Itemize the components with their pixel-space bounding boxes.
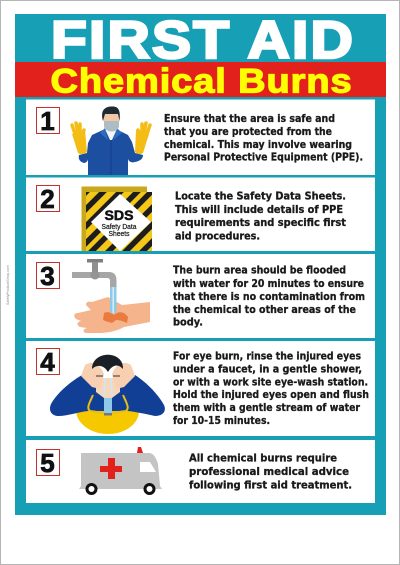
- number badge 2: [36, 184, 60, 214]
- step 3 text: that there is no contamination from: [173, 292, 365, 303]
- number badge 3: 3: [40, 261, 55, 291]
- step 5 text: following first aid treatment.: [189, 480, 352, 491]
- step 4 text: [173, 352, 369, 427]
- step 4 text: or with a work site eye-wash station.: [173, 378, 368, 388]
- icon: ambulance: [79, 447, 162, 494]
- step 1 text: that you are protected from the: [164, 127, 332, 138]
- step 2 text: aid procedures.: [175, 231, 260, 242]
- step 1 text: [164, 114, 363, 164]
- step 4 text: Hold the injured eyes open and flush: [173, 390, 369, 401]
- panel: step 4: [26, 341, 375, 436]
- number badge 2: 2: [40, 184, 55, 214]
- icon: worker in protective equipment: [72, 106, 150, 175]
- step 4 text: them with a gentle stream of water: [173, 403, 360, 414]
- step 2 text: Locate the Safety Data Sheets.: [175, 192, 346, 202]
- step 4 text: for 10-15 minutes.: [173, 416, 270, 427]
- icon: hand under running faucet: [72, 259, 150, 333]
- icon: man rinsing eyes at eye-wash station: [50, 355, 165, 434]
- step 1 text: Personal Protective Equipment (PPE).: [164, 152, 363, 164]
- number badge 4: 4: [40, 347, 55, 377]
- red subtitle band: [15, 62, 386, 97]
- step 2 text: This will include details of PPE: [175, 205, 343, 216]
- number badge 5: [36, 448, 60, 478]
- step 5 text: [189, 454, 352, 491]
- step 3 text: with water for 20 minutes to ensure: [173, 279, 364, 290]
- step 1 text: chemical. This may involve wearing: [164, 140, 352, 151]
- step 4 text: For eye burn, rinse the injured eyes: [173, 352, 361, 362]
- title: FIRST AID: [51, 11, 355, 70]
- icon: safety data sheets binder: Sheets: [108, 229, 130, 238]
- number badge 5: 5: [40, 448, 55, 478]
- label: SDS: SDS: [104, 208, 134, 223]
- number badge 1: 1: [40, 106, 55, 136]
- step 2 text: requirements and specific first: [175, 218, 346, 229]
- step 3 text: body.: [173, 318, 203, 328]
- number badge 3: [36, 261, 60, 291]
- panel: step 3: [26, 254, 375, 338]
- panel: step 2: [26, 178, 375, 259]
- number badge 4: [36, 347, 60, 377]
- step 2 text: [175, 192, 346, 242]
- number badge 1: [36, 106, 60, 136]
- step 3 text: the chemical to other areas of the: [173, 305, 356, 316]
- step 3 text: [173, 266, 365, 328]
- icon: safety data sheets binder: [82, 186, 152, 251]
- panel: step 5: [26, 440, 375, 503]
- step 3 text: The burn area should be flooded: [173, 266, 346, 276]
- icon: safety data sheets binder: Safety Data: [102, 222, 137, 231]
- side credit text: SafetyProductShop.com: [6, 265, 10, 305]
- step 4 text: under a faucet, in a gentle shower,: [173, 364, 362, 376]
- panel: step 1: [26, 100, 375, 175]
- step 5 text: All chemical burns require: [189, 454, 337, 464]
- subtitle: Chemical Burns: [50, 62, 352, 100]
- step 5 text: professional medical advice: [189, 467, 349, 478]
- step 1 text: Ensure that the area is safe and: [164, 114, 335, 125]
